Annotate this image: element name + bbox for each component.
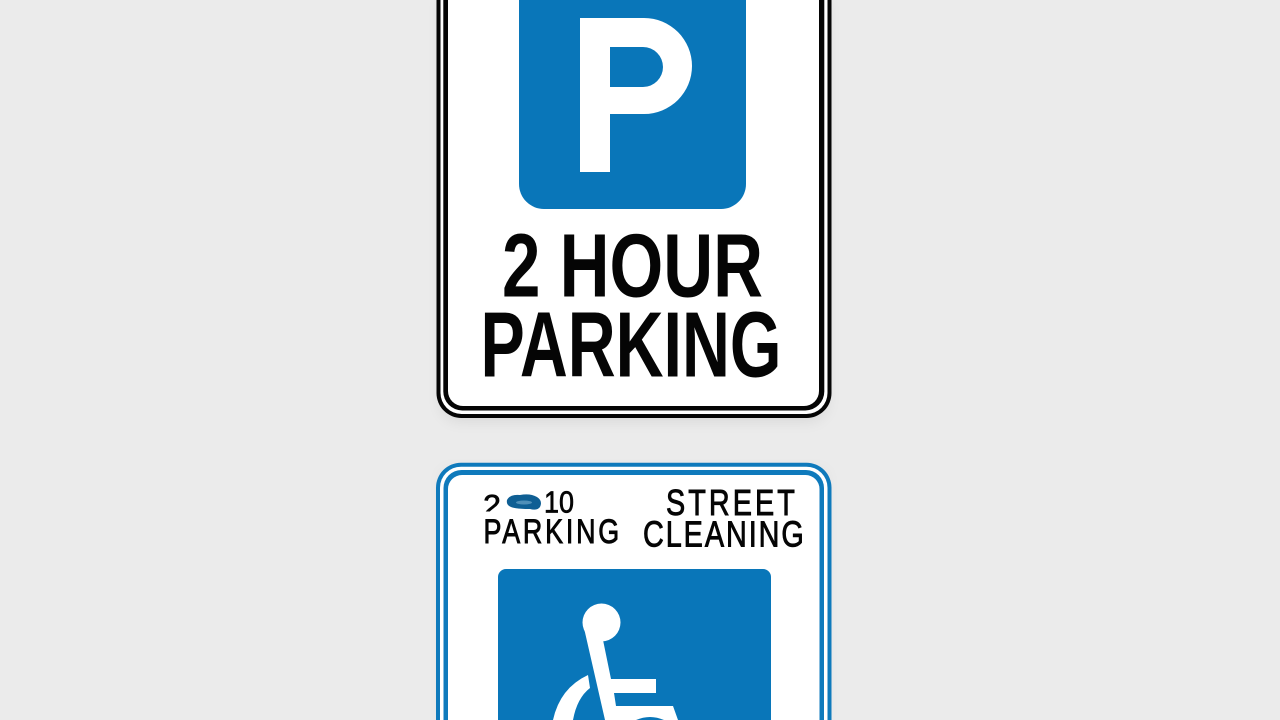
text: parking: PARKING <box>480 292 782 396</box>
wheelchair wheel <box>553 675 590 720</box>
sign shadow <box>442 470 826 720</box>
text: parking: PARKING <box>484 512 619 551</box>
wheelchair wheel gap <box>636 717 664 720</box>
smudge <box>507 494 541 510</box>
icon: wheelchair symbol <box>498 569 771 720</box>
text: cleaning: CLEANING <box>643 513 804 554</box>
sign double border <box>436 463 832 720</box>
wheelchair body <box>584 628 678 720</box>
sign shadow <box>442 0 826 420</box>
text: time limit: 10 <box>544 486 574 520</box>
text: time limit: 2 <box>483 489 501 523</box>
sign: accessible parking <box>436 463 832 720</box>
icon: parking P <box>519 0 746 209</box>
text: 2 hour: 2 HOUR <box>502 216 763 316</box>
sign: 2 hour parking <box>436 0 832 420</box>
wheelchair head <box>582 604 620 642</box>
text: street: STREET <box>666 482 795 523</box>
sign double border <box>436 0 832 418</box>
text: time limit <box>484 490 574 514</box>
